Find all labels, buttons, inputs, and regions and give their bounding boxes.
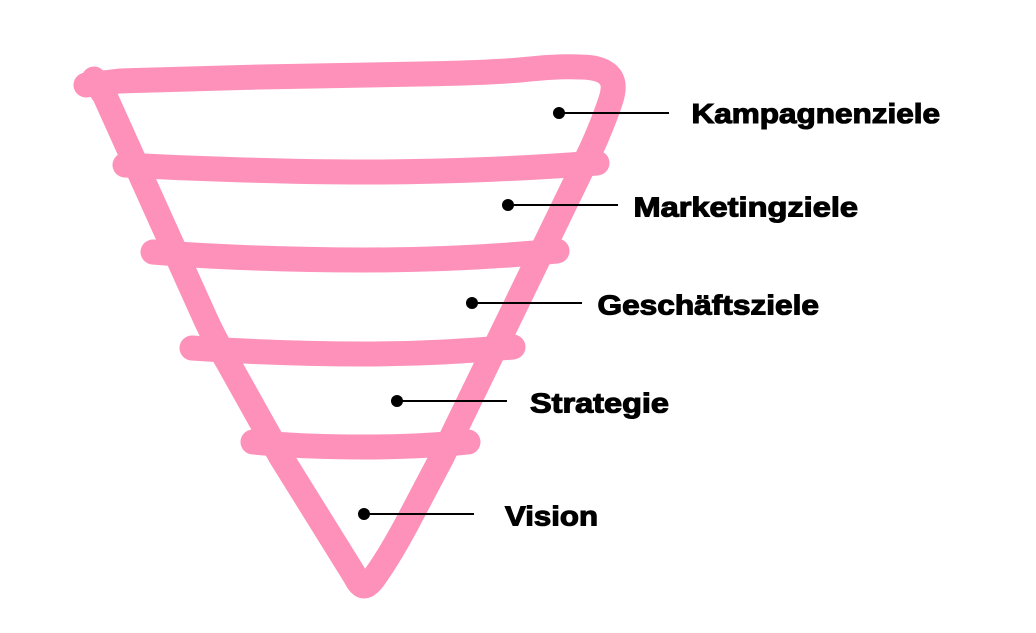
band: Kampagnenziele lower edge: [125, 163, 597, 172]
label: Strategie: Strategie: [530, 388, 669, 418]
label: Kampagnenziele: Kampagnenziele: [692, 98, 940, 129]
label: Geschäftsziele: Geschäftsziele: [598, 290, 819, 320]
band: Strategie lower edge: [253, 442, 468, 447]
band: Marketingziele lower edge: [153, 251, 557, 260]
label: Marketingziele: Marketingziele: [634, 192, 858, 222]
label: Kampagnenziele: [553, 98, 940, 129]
band: Geschäftsziele lower edge: [192, 347, 513, 354]
label: Vision: [358, 500, 598, 532]
label: Geschäftsziele: [466, 290, 819, 320]
label: Vision: Vision: [505, 500, 598, 532]
label: Marketingziele: [502, 192, 858, 222]
label: Strategie: [391, 388, 669, 418]
funnel outline: [86, 67, 613, 586]
